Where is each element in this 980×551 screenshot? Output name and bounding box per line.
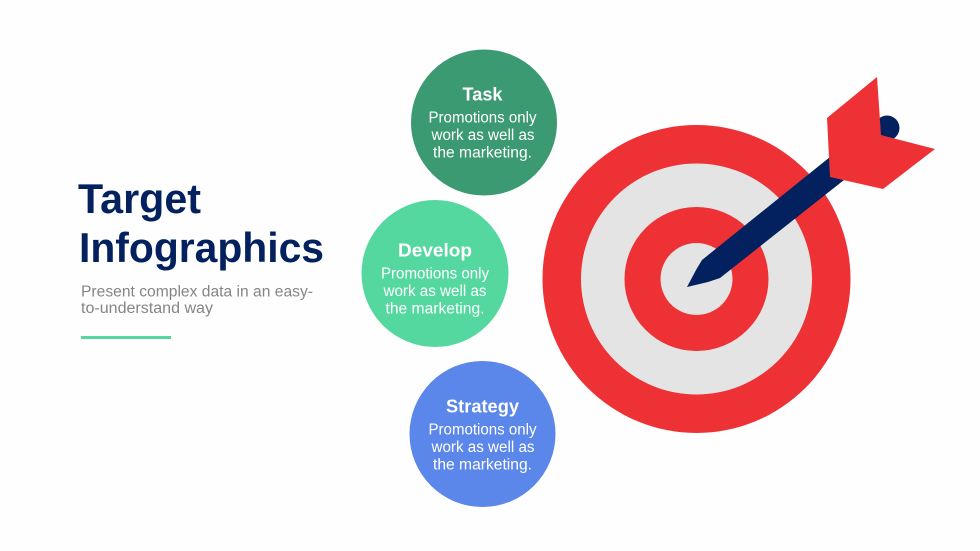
title: [78, 175, 324, 271]
circle: Task: [411, 50, 557, 196]
title: Infographics: [79, 224, 324, 271]
circle: Develop: Promotions only: [381, 266, 489, 282]
target bullseye: [542, 125, 850, 433]
circle: Strategy: [410, 361, 556, 507]
circle: Develop: the marketing.: [386, 300, 484, 318]
circle: Strategy: the marketing.: [433, 456, 532, 474]
subtitle: [81, 284, 313, 317]
arrow: [687, 77, 935, 287]
title: Target: [78, 175, 201, 222]
accent underline: [81, 336, 171, 339]
circle: Task: the marketing.: [433, 144, 532, 162]
subtitle: to-understand way: [81, 300, 213, 317]
circle: Task: Promotions only: [428, 110, 537, 126]
subtitle: Present complex data in an easy-: [81, 284, 313, 300]
circle: Develop: [362, 200, 508, 347]
circle: Strategy: Strategy: [446, 396, 520, 416]
circle: Strategy: work as well as: [431, 439, 535, 456]
circle: Task: Task: [462, 84, 503, 104]
circle: Task: work as well as: [431, 127, 535, 144]
circle: Develop: work as well as: [383, 283, 487, 300]
circle: Develop: Develop: [398, 240, 472, 260]
circle: Strategy: Promotions only: [428, 422, 537, 438]
